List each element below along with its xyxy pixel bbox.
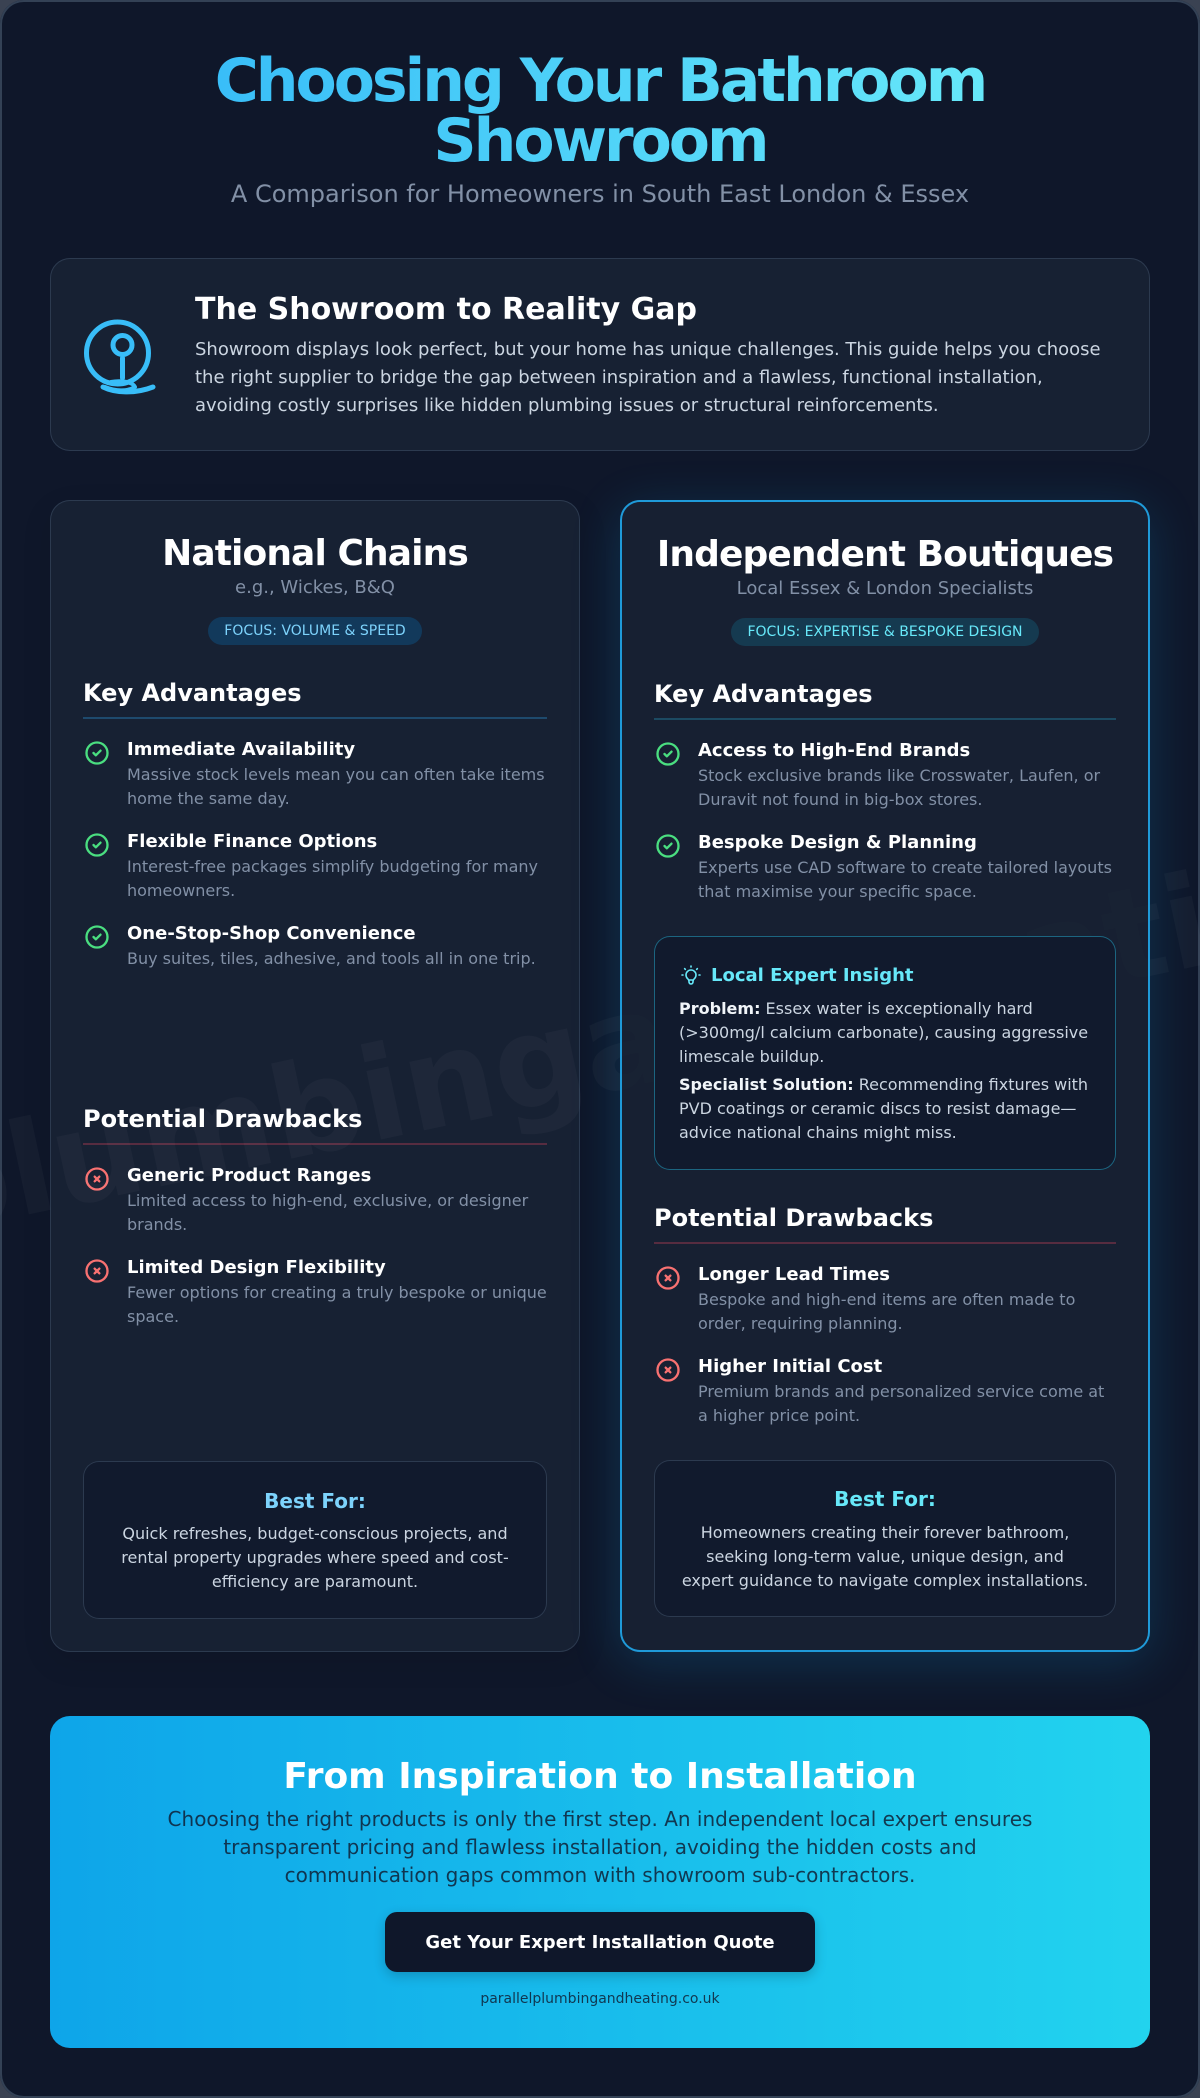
icon: check [656, 742, 680, 766]
advantage item: homeowners. [127, 881, 235, 900]
column heading: Independent Boutiques [657, 534, 1113, 575]
best for text: Quick refreshes, budget-conscious projects, and [122, 1524, 508, 1543]
drawback item: Limited access to high-end, exclusive, or designer [127, 1191, 528, 1210]
drawback item: a higher price point. [698, 1406, 860, 1425]
title: Showroom [433, 106, 767, 176]
callout: local expert insight [654, 936, 1116, 1170]
icon: cross [656, 1358, 680, 1382]
subtitle: A Comparison for Homeowners in South East London & Essex [231, 180, 969, 208]
best for text: expert guidance to navigate complex installations. [682, 1571, 1088, 1590]
intro heading: The Showroom to Reality Gap [195, 292, 697, 327]
advantage item [85, 831, 538, 900]
icon: check [85, 925, 109, 949]
drawback item: Premium brands and personalized service come at [698, 1382, 1104, 1401]
panel: call to action [50, 1716, 1150, 2048]
intro text: the right supplier to bridge the gap between inspiration and a flawless, functional installation, [195, 367, 1043, 388]
icon: check [656, 834, 680, 858]
advantage item [85, 739, 545, 808]
advantage item: Stock exclusive brands like Crosswater, Laufen, or [698, 766, 1100, 785]
column heading: National Chains [162, 533, 468, 574]
advantage item: Access to High-End Brands [698, 740, 970, 761]
intro text: Showroom displays look perfect, but your home has unique challenges. This guide helps you choose [195, 339, 1101, 360]
advantage item: Immediate Availability [127, 739, 355, 760]
drawback item: order, requiring planning. [698, 1314, 903, 1333]
best for box [654, 1460, 1116, 1617]
drawback item: Fewer options for creating a truly bespoke or unique [127, 1283, 547, 1302]
cta text: transparent pricing and flawless installation, avoiding the hidden costs and [223, 1835, 977, 1859]
advantage item [85, 923, 536, 968]
best for text [121, 1524, 509, 1591]
cta text [168, 1807, 1032, 1887]
advantage item: that maximise your specific space. [698, 882, 977, 901]
panel: independent boutiques [620, 500, 1150, 1652]
title [200, 51, 1000, 171]
drawback item: space. [127, 1307, 179, 1326]
cta text: communication gaps common with showroom sub-contractors. [285, 1863, 915, 1887]
callout heading: Local Expert Insight [711, 965, 914, 986]
focus pill [208, 617, 422, 645]
drawback item: Longer Lead Times [698, 1264, 890, 1285]
panel: showroom to reality gap intro [50, 258, 1150, 451]
advantage item: Buy suites, tiles, adhesive, and tools all in one trip. [127, 949, 536, 968]
focus pill [731, 618, 1039, 646]
best for text: rental property upgrades where speed and cost- [121, 1548, 509, 1567]
callout problem text: (>300mg/l calcium carbonate), causing aggressive [679, 1023, 1088, 1042]
cta button [385, 1912, 815, 1972]
advantage item [656, 740, 1100, 809]
best for text: Homeowners creating their forever bathroom, [701, 1523, 1069, 1542]
callout problem text: Problem: Essex water is exceptionally hard [679, 999, 1033, 1018]
best for text: seeking long-term value, unique design, and [706, 1547, 1064, 1566]
column subheading: e.g., Wickes, B&Q [235, 577, 395, 598]
cta text: Choosing the right products is only the first step. An independent local expert ensures [168, 1807, 1032, 1831]
column subheading: Local Essex & London Specialists [737, 578, 1033, 599]
advantage item [656, 832, 1112, 901]
drawback item: Limited Design Flexibility [127, 1257, 386, 1278]
callout solution text: PVD coatings or ceramic discs to resist damage— [679, 1099, 1076, 1118]
icon: location pin in ring [84, 320, 156, 394]
icon: check [85, 741, 109, 765]
advantage item: Massive stock levels mean you can often take items [127, 765, 545, 784]
advantage item: Bespoke Design & Planning [698, 832, 977, 853]
title: Choosing Your Bathroom [215, 46, 985, 116]
drawback item: Bespoke and high-end items are often made to [698, 1290, 1075, 1309]
intro text: avoiding costly surprises like hidden plumbing issues or structural reinforcements. [195, 395, 939, 416]
advantage item: Flexible Finance Options [127, 831, 377, 852]
best for heading: Best For: [264, 1489, 366, 1513]
callout problem text [679, 999, 1088, 1066]
cta heading: From Inspiration to Installation [283, 1756, 917, 1797]
drawback item: brands. [127, 1215, 187, 1234]
drawbacks heading: Potential Drawbacks [654, 1204, 933, 1232]
drawback item [85, 1165, 528, 1234]
drawbacks heading: Potential Drawbacks [83, 1105, 362, 1133]
advantage item: home the same day. [127, 789, 290, 808]
focus pill: FOCUS: VOLUME & SPEED [224, 623, 406, 639]
website url: parallelplumbingandheating.co.uk [480, 1991, 720, 2007]
intro text [195, 339, 1101, 416]
advantage item: Experts use CAD software to create tailored layouts [698, 858, 1112, 877]
icon: check [85, 833, 109, 857]
callout problem text: limescale buildup. [679, 1047, 824, 1066]
advantages heading: Key Advantages [654, 680, 873, 708]
drawback item [85, 1257, 547, 1326]
panel: national chains [50, 500, 580, 1652]
advantage item: One-Stop-Shop Convenience [127, 923, 416, 944]
cta button: Get Your Expert Installation Quote [425, 1932, 775, 1953]
icon: cross [85, 1259, 109, 1283]
drawback item [656, 1264, 1075, 1333]
best for box [83, 1461, 547, 1619]
best for text: efficiency are paramount. [212, 1572, 418, 1591]
advantages heading: Key Advantages [83, 679, 302, 707]
callout solution text [679, 1075, 1088, 1142]
callout solution text: advice national chains might miss. [679, 1123, 957, 1142]
advantage item: Interest-free packages simplify budgeting for many [127, 857, 538, 876]
icon: cross [85, 1167, 109, 1191]
drawback item [656, 1356, 1104, 1425]
drawback item: Higher Initial Cost [698, 1356, 882, 1377]
callout solution text: Specialist Solution: Recommending fixtures with [679, 1075, 1088, 1094]
focus pill: FOCUS: EXPERTISE & BESPOKE DESIGN [747, 624, 1023, 640]
icon: light bulb [681, 965, 701, 985]
advantage item: Duravit not found in big-box stores. [698, 790, 982, 809]
best for heading: Best For: [834, 1487, 936, 1511]
drawback item: Generic Product Ranges [127, 1165, 371, 1186]
icon: cross [656, 1266, 680, 1290]
best for text [682, 1523, 1088, 1590]
